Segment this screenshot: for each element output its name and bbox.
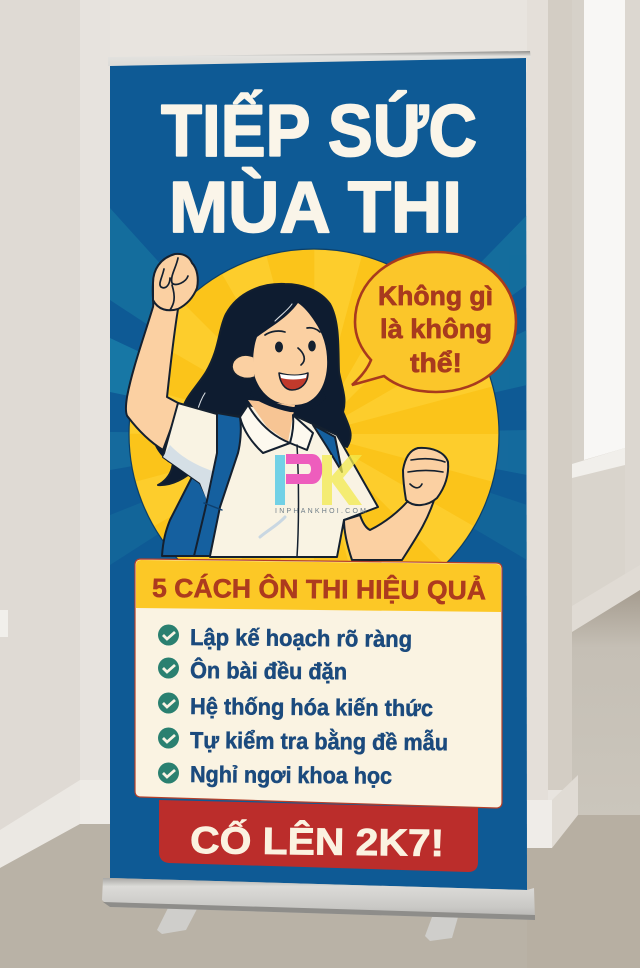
speech bubble (352, 252, 516, 392)
speech text: thể! (410, 348, 462, 378)
hair back (158, 284, 351, 485)
student illustration (126, 254, 448, 560)
right arm (344, 497, 435, 560)
shirt sheen (260, 517, 285, 537)
collar left (240, 405, 290, 453)
eyes (275, 340, 316, 352)
sun circle (129, 249, 499, 619)
title: TIẾP SỨC (161, 91, 477, 172)
speech text: là không (380, 314, 492, 344)
title: MÙA THI (169, 167, 462, 248)
stand feet (157, 908, 458, 941)
checklist: Hệ thống hóa kiến thức (190, 693, 433, 721)
banner: blue background with rays (100, 50, 540, 900)
check icons (158, 624, 179, 784)
checklist (190, 624, 448, 789)
backpack strap right (313, 425, 342, 472)
call-to-action text: CỐ LÊN 2K7! (190, 817, 444, 865)
panel heading: 5 CÁCH ÔN THI HIỆU QUẢ (152, 573, 486, 605)
backpack strap left (194, 413, 241, 556)
strap seam (204, 503, 222, 510)
hair highlights (197, 304, 292, 412)
backpack (162, 477, 212, 556)
right fist (403, 448, 448, 505)
shirt (163, 403, 378, 557)
banner top rail (108, 51, 531, 66)
call-to-action ribbon (159, 800, 478, 872)
checklist: Ôn bài đều đặn (190, 656, 347, 684)
right fist fingers (408, 459, 445, 488)
banner stand base (102, 878, 535, 941)
panel card (135, 559, 502, 808)
hair under arm (153, 425, 185, 470)
panel: 5 study tips (135, 559, 502, 808)
checklist: Nghỉ ngơi khoa học (190, 761, 392, 789)
raised arm (126, 283, 180, 450)
placket (297, 445, 298, 557)
neck opening (248, 400, 295, 442)
face (253, 303, 327, 405)
fist fingers (160, 258, 188, 310)
checklist: Tự kiểm tra bằng đề mẫu (190, 726, 448, 755)
watermark logo (275, 454, 366, 515)
speech text (378, 281, 493, 378)
title (161, 91, 477, 248)
collar right (290, 415, 313, 450)
watermark logo: INPHANKHOI.COM (275, 508, 366, 515)
brows and nose (265, 328, 320, 365)
ear (232, 355, 255, 378)
raised fist (153, 254, 198, 310)
neck shadow (250, 383, 326, 412)
speech text: Không gì (378, 281, 493, 311)
sleeve shadow (163, 445, 215, 503)
mouth (279, 373, 308, 390)
panel header band (136, 560, 501, 612)
checklist: Lập kế hoạch rõ ràng (190, 624, 412, 652)
